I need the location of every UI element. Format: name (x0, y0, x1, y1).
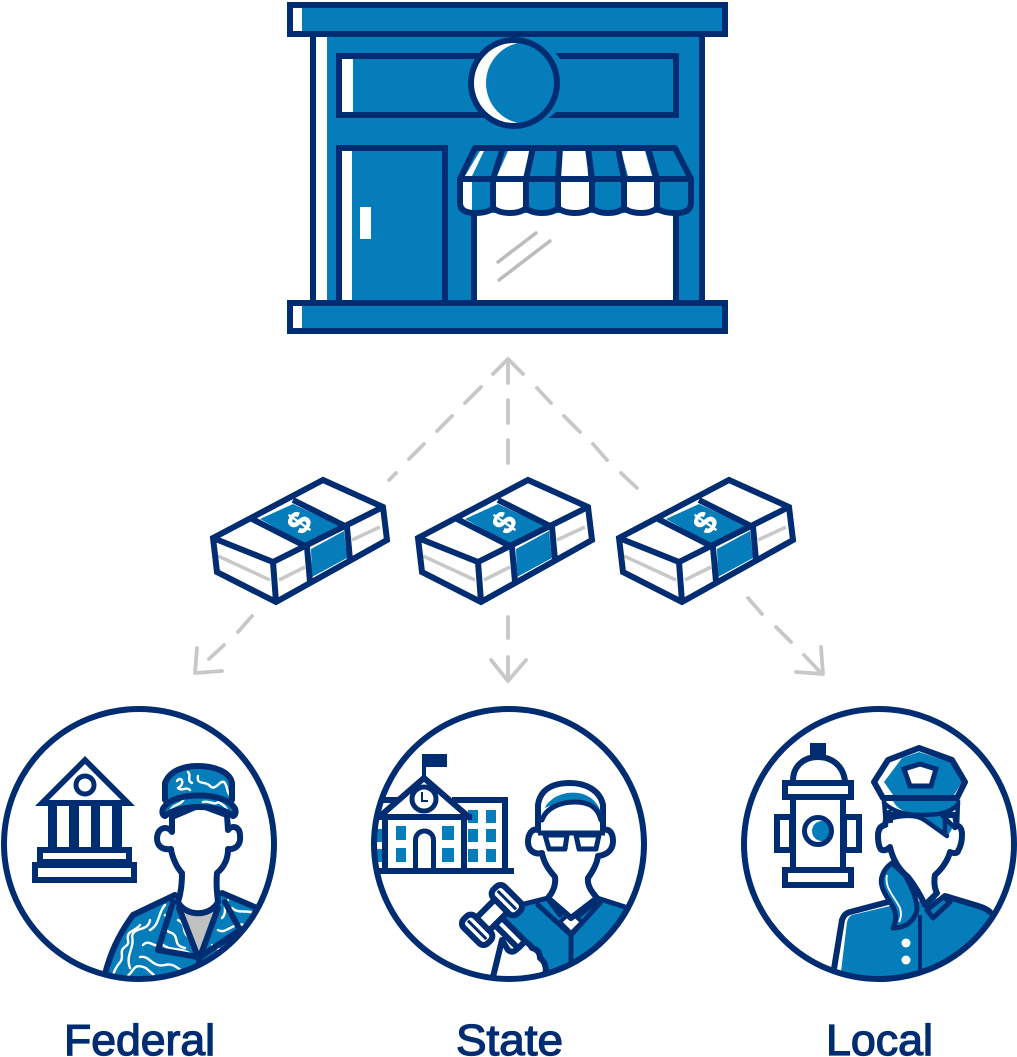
door (339, 148, 445, 301)
money stack: local (619, 480, 793, 602)
icon: government building (35, 756, 135, 880)
building body (313, 34, 702, 303)
police cap (874, 748, 965, 815)
robe (506, 896, 626, 970)
arrow to state (491, 617, 526, 681)
shop window (474, 205, 676, 301)
arrow to local (748, 598, 823, 674)
head (878, 815, 962, 905)
ponytail (881, 863, 917, 928)
panel: federal (4, 709, 274, 1057)
arrow to federal (195, 616, 252, 673)
uniform (831, 893, 993, 976)
police officer figure (833, 748, 1000, 990)
storefront (290, 5, 725, 331)
gavel and hand (459, 882, 546, 990)
round sign (471, 40, 568, 126)
striped awning (460, 148, 691, 213)
panel: local (744, 709, 1014, 1057)
head (157, 805, 240, 913)
judge figure (459, 780, 626, 976)
left wall highlight (316, 37, 327, 300)
head with hair and glasses (528, 783, 613, 918)
top cornice (290, 5, 725, 34)
arrows from money up to store (389, 359, 637, 488)
circle outline: state (374, 709, 644, 979)
money stack: state (418, 480, 592, 602)
hair under cap (884, 800, 958, 836)
bottom base (290, 303, 725, 331)
camouflage uniform (102, 890, 256, 976)
money stack: federal (213, 480, 387, 602)
sign board (339, 56, 676, 115)
soldier figure (100, 766, 262, 990)
icon: fire hydrant (777, 743, 859, 885)
panel: state (374, 709, 645, 1057)
circle outline: federal (4, 709, 274, 979)
camouflage cap (162, 766, 236, 816)
circle outline: local (744, 709, 1014, 979)
icon: school building (374, 754, 514, 871)
